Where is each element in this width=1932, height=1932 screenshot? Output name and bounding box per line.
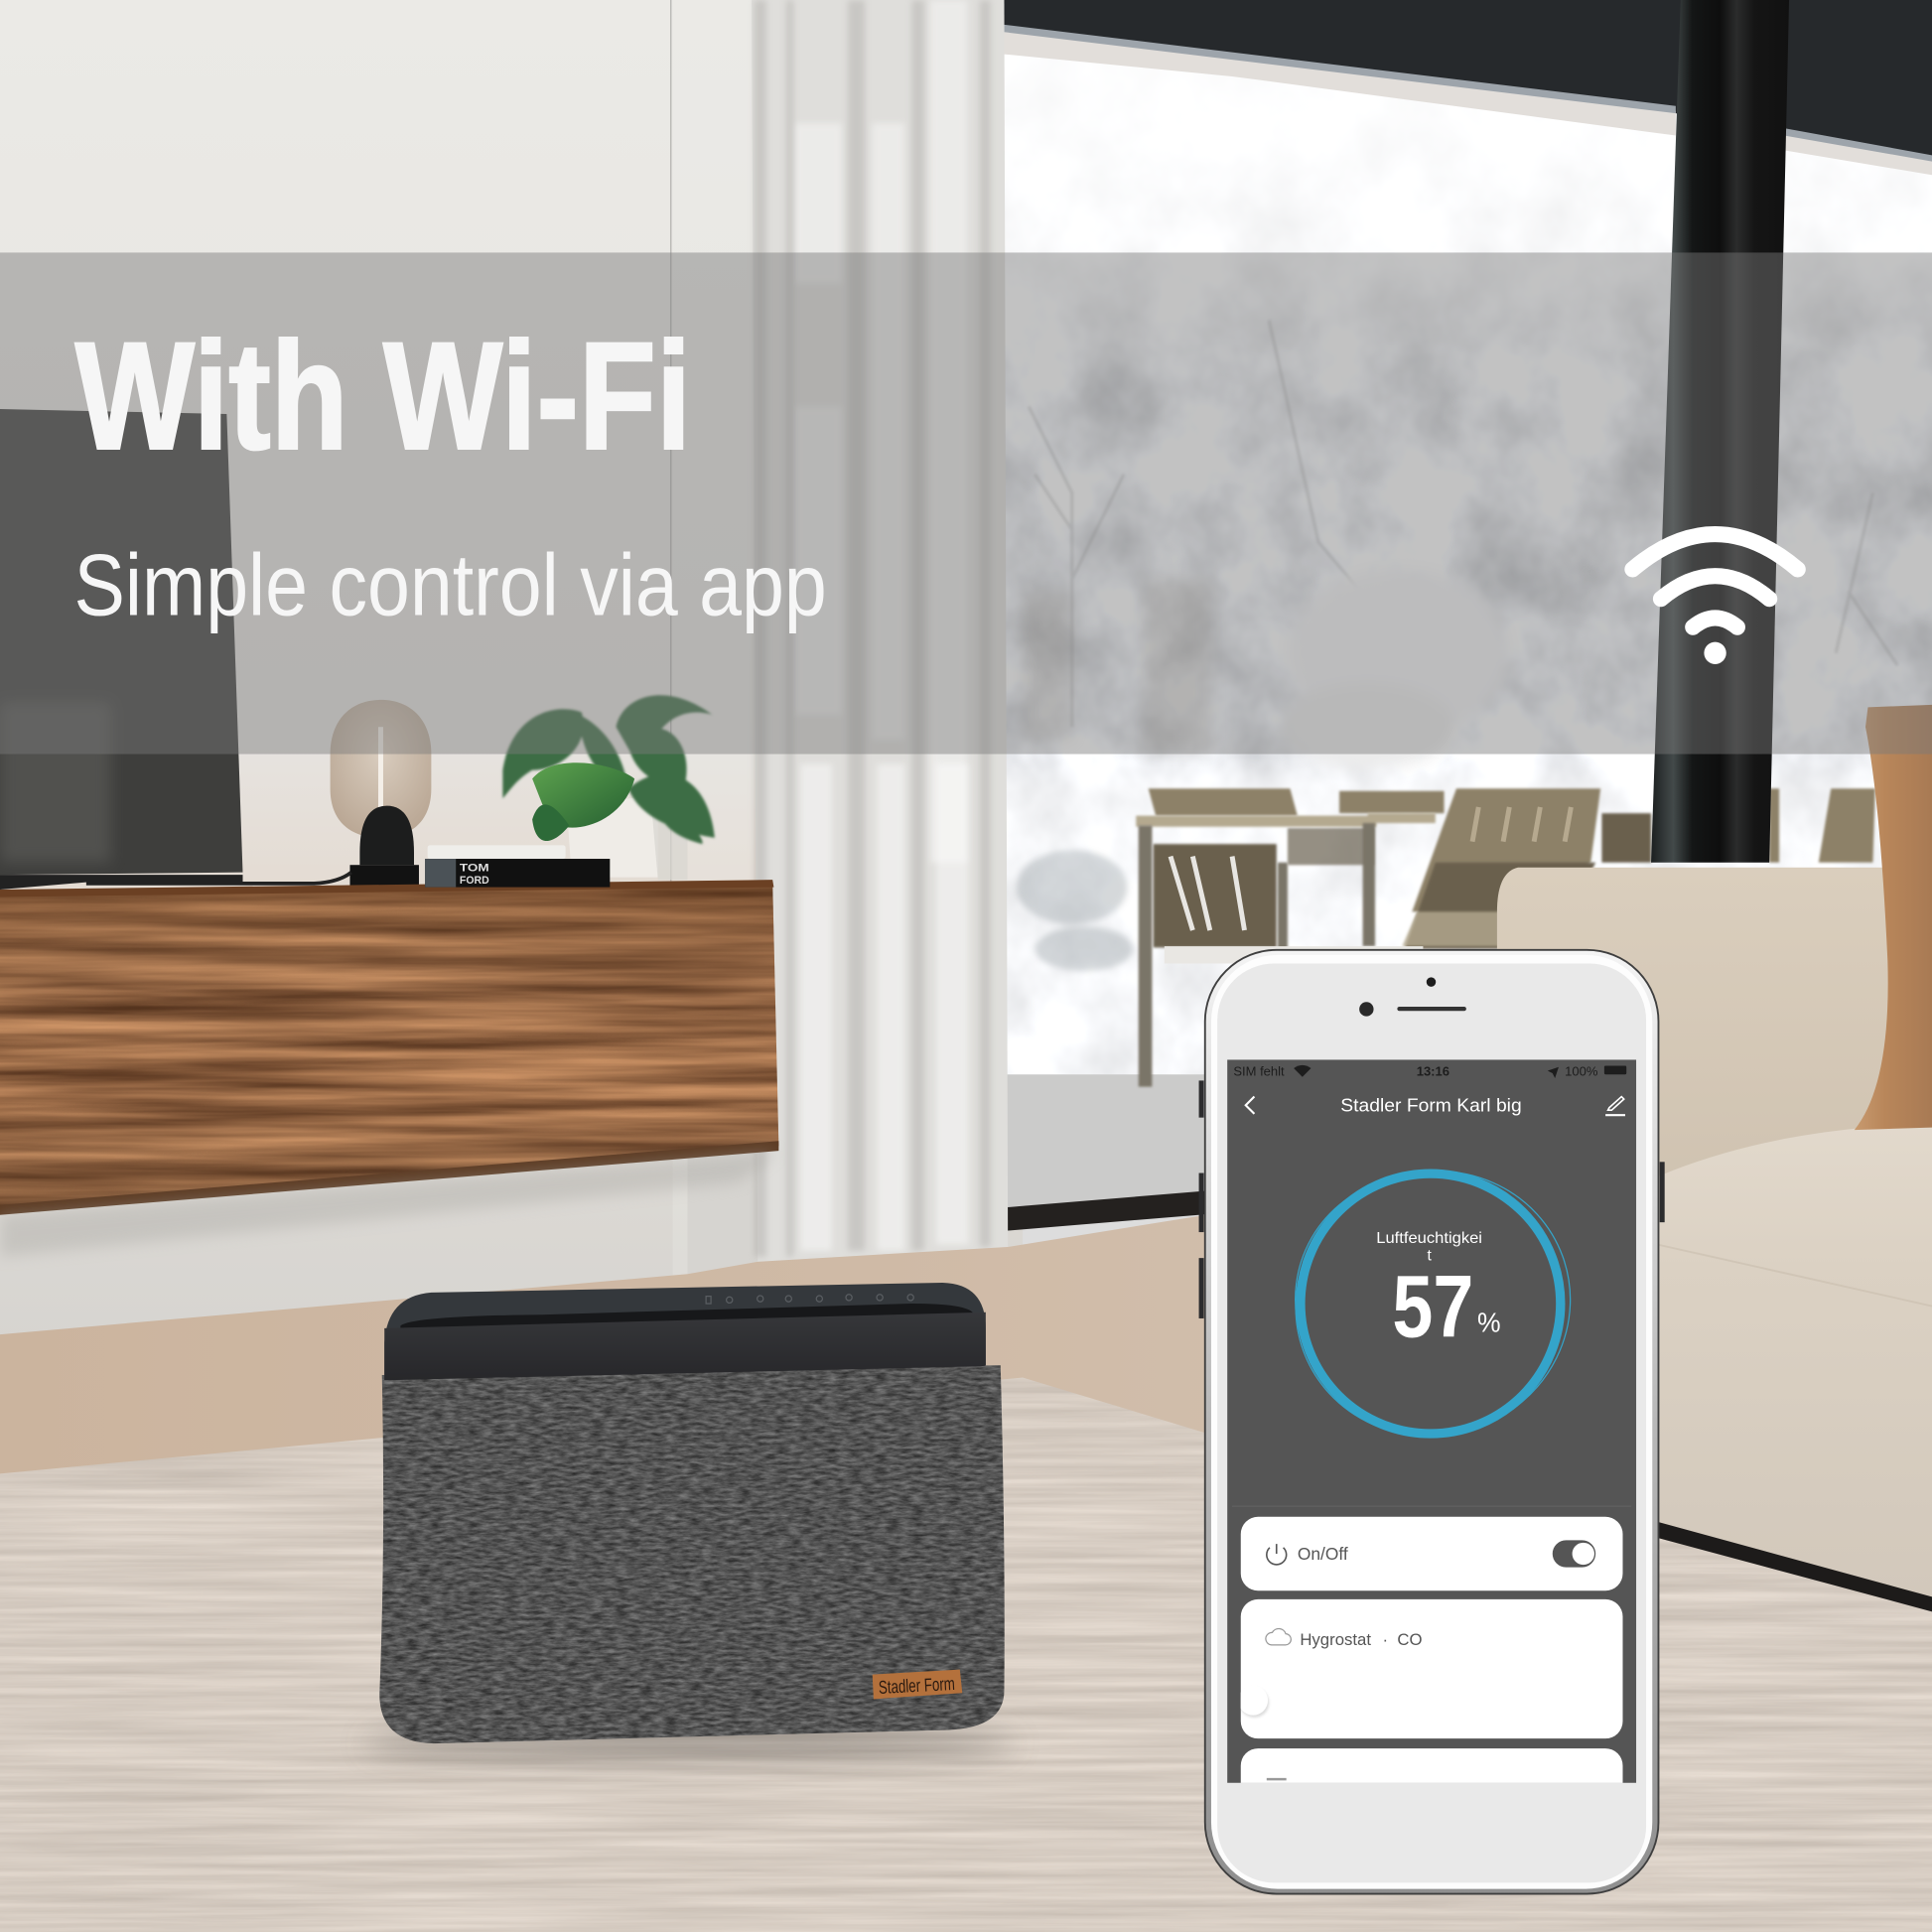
wood sideboard (0, 880, 778, 1215)
side buttons (1199, 1080, 1665, 1318)
books (425, 845, 610, 888)
window base (1004, 1190, 1213, 1231)
plant in pot (502, 695, 715, 880)
curtain (752, 0, 1008, 1262)
status bar: SIM fehlt (1233, 1063, 1285, 1078)
wood deck outside (996, 1074, 1213, 1207)
dark chair seats and frames (1154, 813, 1651, 949)
card: hygrostat: CO (1397, 1630, 1422, 1649)
window pillar (1651, 0, 1789, 863)
back chevron (1246, 1097, 1254, 1114)
books: FORD (460, 875, 489, 887)
card: on/off (1241, 1517, 1622, 1590)
speaker (1397, 1007, 1466, 1011)
shadow under sideboard (0, 1151, 778, 1257)
TV (0, 409, 242, 890)
translucent grey band (0, 252, 1932, 755)
sofa (1497, 868, 1932, 1611)
humidity label: Luftfeuchtigkei (1376, 1230, 1482, 1247)
rug (0, 1378, 1932, 1932)
orange pillow (1855, 705, 1932, 1130)
heading: With Wi-Fi: With Wi-Fi (75, 311, 691, 482)
books: TOM (460, 862, 489, 874)
wall edge panel (670, 0, 758, 1282)
card: hygrostat (1238, 1599, 1622, 1738)
percent sign: % (1477, 1308, 1501, 1338)
window header (1001, 0, 1932, 167)
edit pencil (1605, 1097, 1625, 1115)
card: on/off: On/Off (1298, 1544, 1348, 1564)
wooden floor (0, 1213, 1725, 1578)
icon: wifi (1632, 534, 1798, 664)
phone white bezel (1211, 955, 1652, 1889)
status bar: 100% (1565, 1063, 1598, 1078)
humidity ring (1295, 1170, 1571, 1439)
window blind rail (1004, 30, 1932, 175)
sensor (1359, 1002, 1374, 1017)
phone frame (1205, 950, 1658, 1894)
humidifier product (379, 1283, 1005, 1743)
phone face (1217, 964, 1646, 1882)
card: hygrostat: · (1382, 1630, 1388, 1649)
snowy window view (996, 0, 1932, 1213)
brand label: Stadler Form (878, 1673, 955, 1698)
status bar (1234, 1064, 1626, 1078)
fabric body (379, 1365, 1005, 1743)
outdoor table and chairs (1136, 788, 1875, 1087)
humidity label: t (1427, 1248, 1432, 1265)
status bar: 13:16 (1417, 1063, 1449, 1078)
humidifier shadow (363, 1728, 1017, 1758)
app screen (1227, 1059, 1636, 1823)
humidity value: 57 (1392, 1257, 1473, 1356)
smartphone (1199, 950, 1665, 1894)
wall (0, 0, 1023, 1355)
touch control icons (706, 1295, 913, 1304)
humidity label (1378, 1231, 1481, 1261)
dark top tray (384, 1283, 986, 1380)
brand label (873, 1670, 962, 1699)
subheading: Simple control via app: Simple control via app (73, 535, 827, 633)
front camera (1427, 977, 1436, 987)
table lamp (86, 700, 431, 886)
card: hygrostat: Hygrostat (1300, 1630, 1371, 1649)
app title: Stadler Form Karl big (1340, 1094, 1522, 1115)
card: partially visible (1241, 1748, 1622, 1783)
